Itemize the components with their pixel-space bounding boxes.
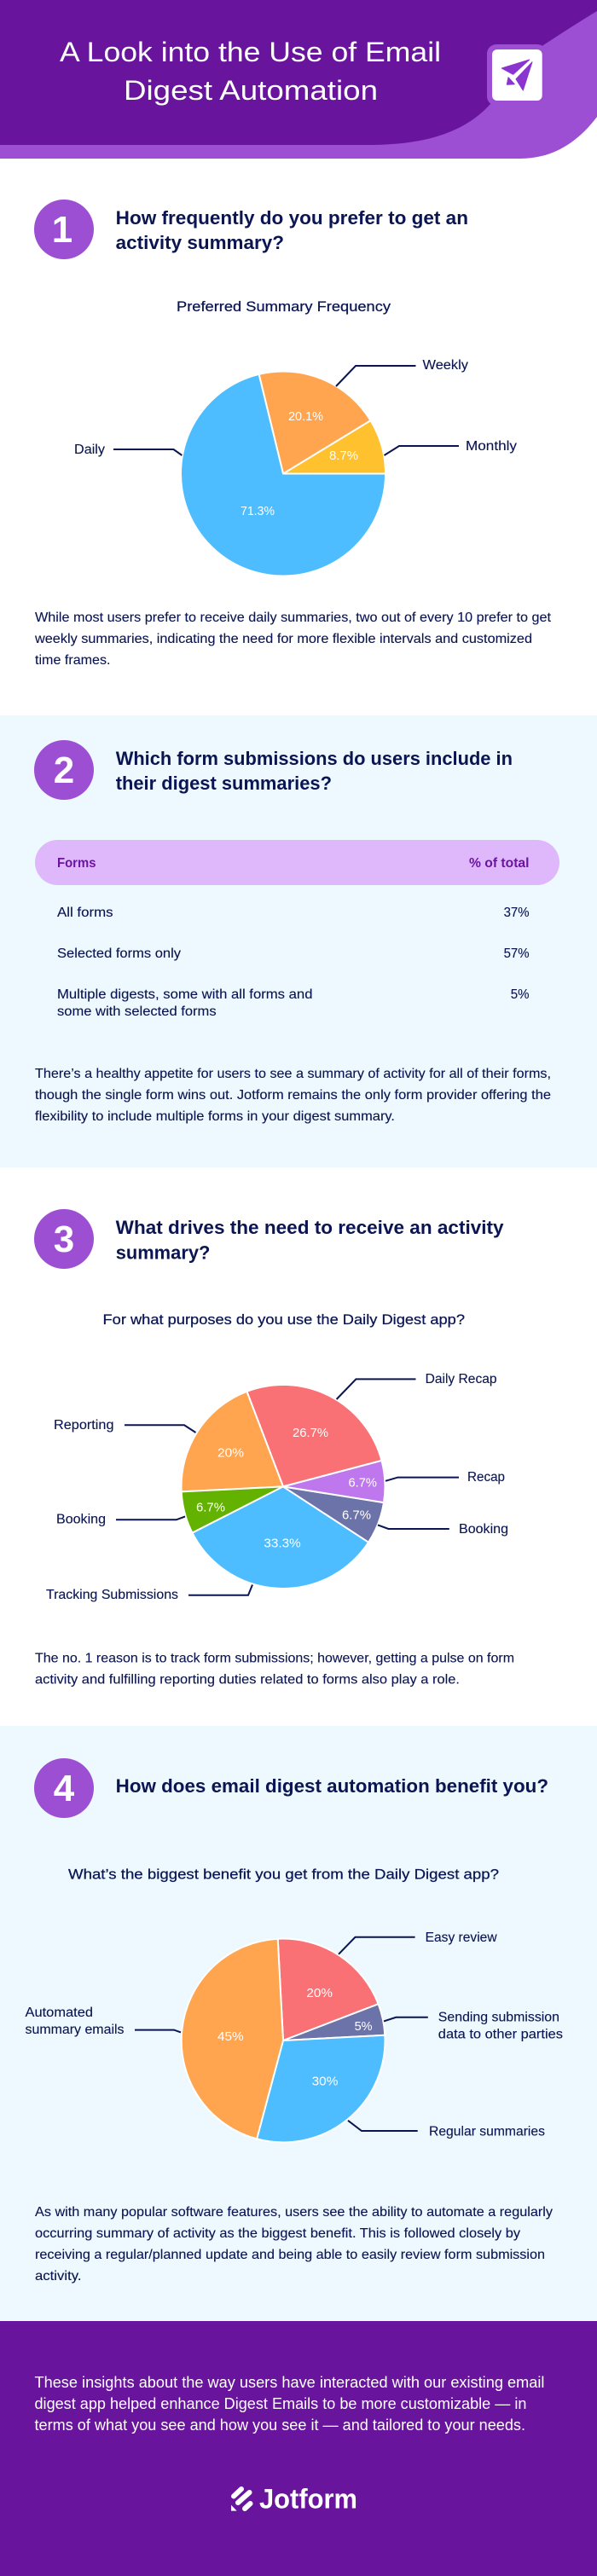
callout: booking right <box>378 1522 508 1537</box>
callout: weekly: Weekly <box>423 358 468 373</box>
heading: section 3: What drives the need to receive an activity <box>116 1217 504 1238</box>
table row: all forms: All forms <box>57 906 113 920</box>
heading: section 2: Which form submissions do users include in <box>116 748 513 769</box>
pie chart: summary frequency: 71.3% <box>241 504 275 518</box>
icon: number 4 <box>34 1758 94 1818</box>
heading: section 3: summary? <box>116 1242 210 1264</box>
callout: tracking submissions: Tracking Submissions <box>46 1588 178 1602</box>
callout: sending submission data: Sending submission <box>438 2010 559 2024</box>
text block: section 4 summary: receiving a regular/planned update and being able to easily review form submission <box>35 2248 545 2262</box>
panel: footer <box>0 2321 597 2576</box>
pie chart: purposes: 6.7% <box>196 1500 225 1514</box>
text block: section 4 summary: occurring summary of activity as the biggest benefit. This is followed closely by <box>35 2226 520 2241</box>
callout: booking left: Booking <box>56 1513 106 1526</box>
callout: daily <box>74 443 182 457</box>
heading: section 2: their digest summaries? <box>116 773 332 794</box>
text block: section 2 summary: There’s a healthy appetite for users to see a summary of activity for all of their forms, <box>35 1067 551 1081</box>
chart title: purposes: For what purposes do you use the Daily Digest app? <box>102 1311 465 1328</box>
table header <box>35 840 559 885</box>
callout: tracking submissions <box>46 1584 252 1602</box>
chart title: biggest benefit: What’s the biggest benefit you get from the Daily Digest app? <box>68 1866 499 1882</box>
pie chart: benefits: 5% <box>355 2019 373 2034</box>
heading: section 1 <box>116 207 468 253</box>
table row: multiple digests: some with selected forms <box>57 1004 217 1019</box>
callout: booking right: Booking <box>459 1522 508 1537</box>
table row: multiple digests <box>57 987 530 1019</box>
icon: number 4: 4 <box>54 1768 75 1809</box>
heading: section 2 <box>116 748 513 794</box>
text block: section 2 summary <box>35 1067 551 1124</box>
callout: regular summaries <box>348 2121 545 2139</box>
callout: easy review: Easy review <box>426 1931 497 1945</box>
text block: section 1 summary: weekly summaries, indicating the need for more flexible intervals and customized <box>34 632 532 646</box>
panel: section 2 <box>0 715 597 1167</box>
icon: paper plane <box>487 44 547 106</box>
heading: section 1: activity summary? <box>116 232 284 253</box>
icon: number 3: 3 <box>54 1219 74 1260</box>
text block: closing statement: These insights about the way users have interacted with our existing email <box>34 2374 544 2391</box>
heading: section 1: How frequently do you prefer to get an <box>116 207 468 229</box>
text block: section 4 summary: activity. <box>35 2269 82 2284</box>
text block: section 2 summary: flexibility to include multiple forms in your digest summary. <box>35 1109 395 1124</box>
panel: section 4 <box>0 1726 597 2321</box>
callout: daily recap <box>337 1372 497 1399</box>
table row: all forms: 37% <box>504 906 530 920</box>
pie chart: benefits: 45% <box>217 2029 244 2044</box>
callout: easy review <box>339 1931 497 1954</box>
table header: % of total <box>469 856 529 871</box>
pie chart: benefits: 30% <box>312 2074 338 2089</box>
callout: regular summaries: Regular summaries <box>429 2124 545 2139</box>
table row: multiple digests: Multiple digests, some with all forms and <box>57 987 312 1002</box>
callout: reporting: Reporting <box>54 1418 114 1433</box>
text block: section 4 summary: As with many popular software features, users see the ability to automate a regularly <box>35 2205 553 2220</box>
callout: weekly <box>336 358 468 386</box>
text block: closing statement: digest app helped enhance Digest Emails to be more customizable — in <box>34 2395 526 2412</box>
callout: daily recap: Daily Recap <box>426 1372 497 1386</box>
text block: section 4 summary <box>35 2205 553 2284</box>
text block: section 2 summary: though the single form wins out. Jotform remains the only form provider offering the <box>35 1088 551 1103</box>
icon: number 3 <box>34 1209 94 1269</box>
text block: closing statement: terms of what you see and how you see it — and tailored to your needs. <box>34 2417 525 2434</box>
text block: section 1 summary <box>34 611 552 668</box>
pie chart: summary frequency <box>74 358 517 576</box>
icon: number 2: 2 <box>54 750 74 791</box>
pie chart: purposes: 6.7% <box>348 1476 377 1491</box>
pie chart: purposes: 26.7% <box>293 1426 328 1440</box>
table header: Forms <box>57 856 96 871</box>
callout: recap: Recap <box>467 1470 505 1485</box>
callout: automated summary emails: Automated <box>26 2006 93 2020</box>
table row: multiple digests: 5% <box>511 987 530 1002</box>
heading: section 4: How does email digest automation benefit you? <box>116 1775 548 1797</box>
pie chart: purposes: 6.7% <box>342 1508 371 1523</box>
pie chart: benefits: 20% <box>306 1986 333 2000</box>
callout: recap <box>385 1470 505 1485</box>
table row: selected forms: 57% <box>504 946 530 961</box>
panel: header <box>0 0 597 159</box>
pie chart: purposes: 20% <box>217 1446 244 1460</box>
title: A Look into the Use of Email <box>60 37 441 67</box>
pie chart: summary frequency: 20.1% <box>288 409 323 424</box>
table row: selected forms <box>57 946 530 961</box>
title: Digest Automation <box>124 75 378 106</box>
callout: monthly <box>384 439 517 455</box>
callout: booking left <box>56 1513 185 1526</box>
callout: automated summary emails: summary emails <box>26 2023 125 2037</box>
pie chart: benefits <box>26 1931 563 2142</box>
pie chart: summary frequency: 8.7% <box>329 449 358 463</box>
table row: selected forms: Selected forms only <box>57 946 181 961</box>
callout: automated summary emails <box>26 2006 181 2037</box>
text block: section 3 summary: The no. 1 reason is to track form submissions; however, getting a pulse on form <box>35 1651 514 1666</box>
callout: sending submission data: data to other parties <box>438 2027 563 2041</box>
title <box>60 37 441 106</box>
text block: section 1 summary: While most users prefer to receive daily summaries, two out of every 10 prefer to get <box>35 611 552 625</box>
panel: section 3 <box>34 1209 514 1687</box>
icon: number 1 <box>34 200 94 259</box>
chart title: preferred summary frequency: Preferred Summary Frequency <box>177 298 391 315</box>
callout: monthly: Monthly <box>466 439 517 454</box>
icon: number 1: 1 <box>52 209 72 251</box>
heading: section 3 <box>116 1217 504 1264</box>
text block: section 1 summary: time frames. <box>35 653 111 668</box>
text block: closing statement <box>34 2374 544 2434</box>
callout: daily: Daily <box>74 443 105 457</box>
callout: reporting <box>54 1418 196 1433</box>
text block: section 3 summary <box>35 1651 514 1687</box>
icon: number 2 <box>34 740 94 800</box>
text block: section 3 summary: activity and fulfilling reporting duties related to forms also play a role. <box>35 1672 460 1687</box>
callout: sending submission data <box>384 2010 563 2041</box>
panel: section 1 <box>34 200 552 668</box>
table: forms <box>35 840 559 1019</box>
table row: all forms <box>57 906 530 920</box>
icon: Jotform logo: Jotform <box>259 2484 357 2515</box>
pie chart: purposes: 33.3% <box>264 1537 301 1550</box>
pie chart: purposes <box>46 1372 508 1602</box>
